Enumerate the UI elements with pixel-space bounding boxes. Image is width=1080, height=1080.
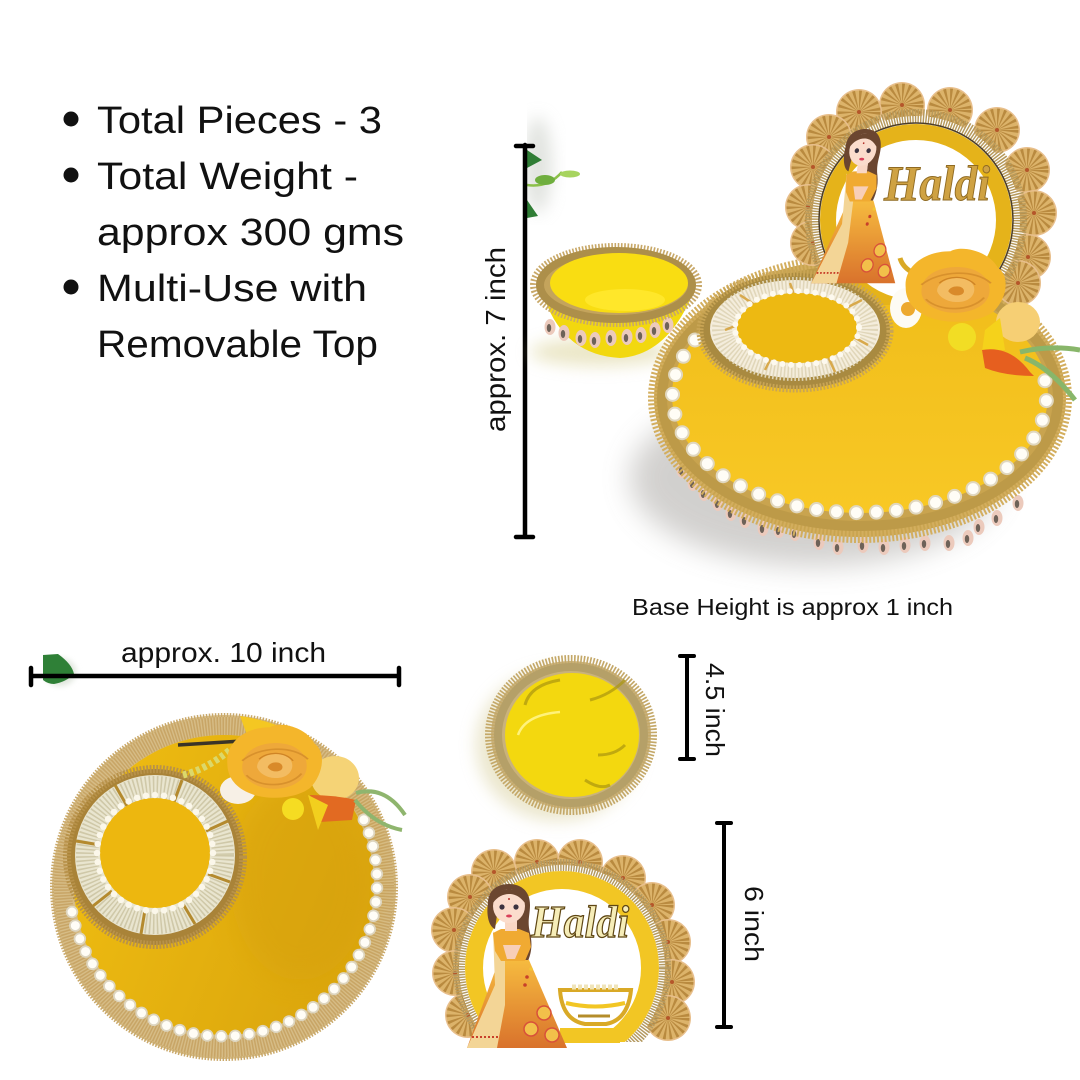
small bowl xyxy=(536,249,696,358)
leaf fragment: lower photo edge xyxy=(43,654,76,686)
photo: plate top view xyxy=(52,715,405,1059)
small haldi bowl cutout xyxy=(900,256,983,280)
bullet: multi-use xyxy=(64,268,378,366)
photo: small bowl underside xyxy=(476,661,651,821)
flower cluster xyxy=(183,716,405,830)
stand foot xyxy=(560,1028,620,1043)
inner ring tray xyxy=(67,769,243,945)
main plate beads xyxy=(676,462,1024,555)
panel: specification list xyxy=(64,100,404,366)
bullet: total weight: Total Weight - xyxy=(97,156,358,198)
bullet: multi-use: Removable Top xyxy=(97,324,378,366)
photo: haldi backdrop top xyxy=(431,839,695,1071)
backing slot xyxy=(178,741,242,745)
dimension: width 10 inch: approx. 10 inch xyxy=(121,637,326,668)
bowl shadow xyxy=(530,338,670,366)
photo: assembled haldi platter set xyxy=(530,82,1080,566)
illustrated bride xyxy=(467,884,567,1048)
flower cluster xyxy=(890,249,1080,400)
dimension: bowl 4.5 inch: 4.5 inch xyxy=(700,663,730,757)
haldi wordmark: Haldi xyxy=(530,896,629,947)
bullet: total weight: approx 300 gms xyxy=(97,212,404,254)
dimension: backdrop 6 inch: 6 inch xyxy=(739,886,769,962)
illustrated bride xyxy=(811,129,914,283)
inner ring tray xyxy=(700,273,890,389)
main plate xyxy=(654,259,1066,537)
dimension: backdrop 6 inch xyxy=(717,823,769,1027)
plate shadow xyxy=(630,390,1000,566)
bullet: multi-use: Multi-Use with xyxy=(97,268,367,310)
caption: base height: Base Height is approx 1 inch xyxy=(632,594,953,620)
bullet: total weight xyxy=(64,156,404,254)
haldi backdrop frame xyxy=(785,82,1057,324)
dimension: height 7 inch xyxy=(480,145,533,537)
dimension: width 10 inch xyxy=(31,637,399,685)
haldi bowl cutout xyxy=(560,987,631,1024)
leaf fragment: upper photo edge xyxy=(524,117,580,218)
bullet: total pieces: Total Pieces - 3 xyxy=(97,100,382,142)
haldi wordmark: Haldi xyxy=(883,155,990,211)
dimension: height 7 inch: approx. 7 inch xyxy=(480,247,511,432)
pearl string xyxy=(72,808,377,1036)
dimension: bowl 4.5 inch xyxy=(680,656,730,759)
